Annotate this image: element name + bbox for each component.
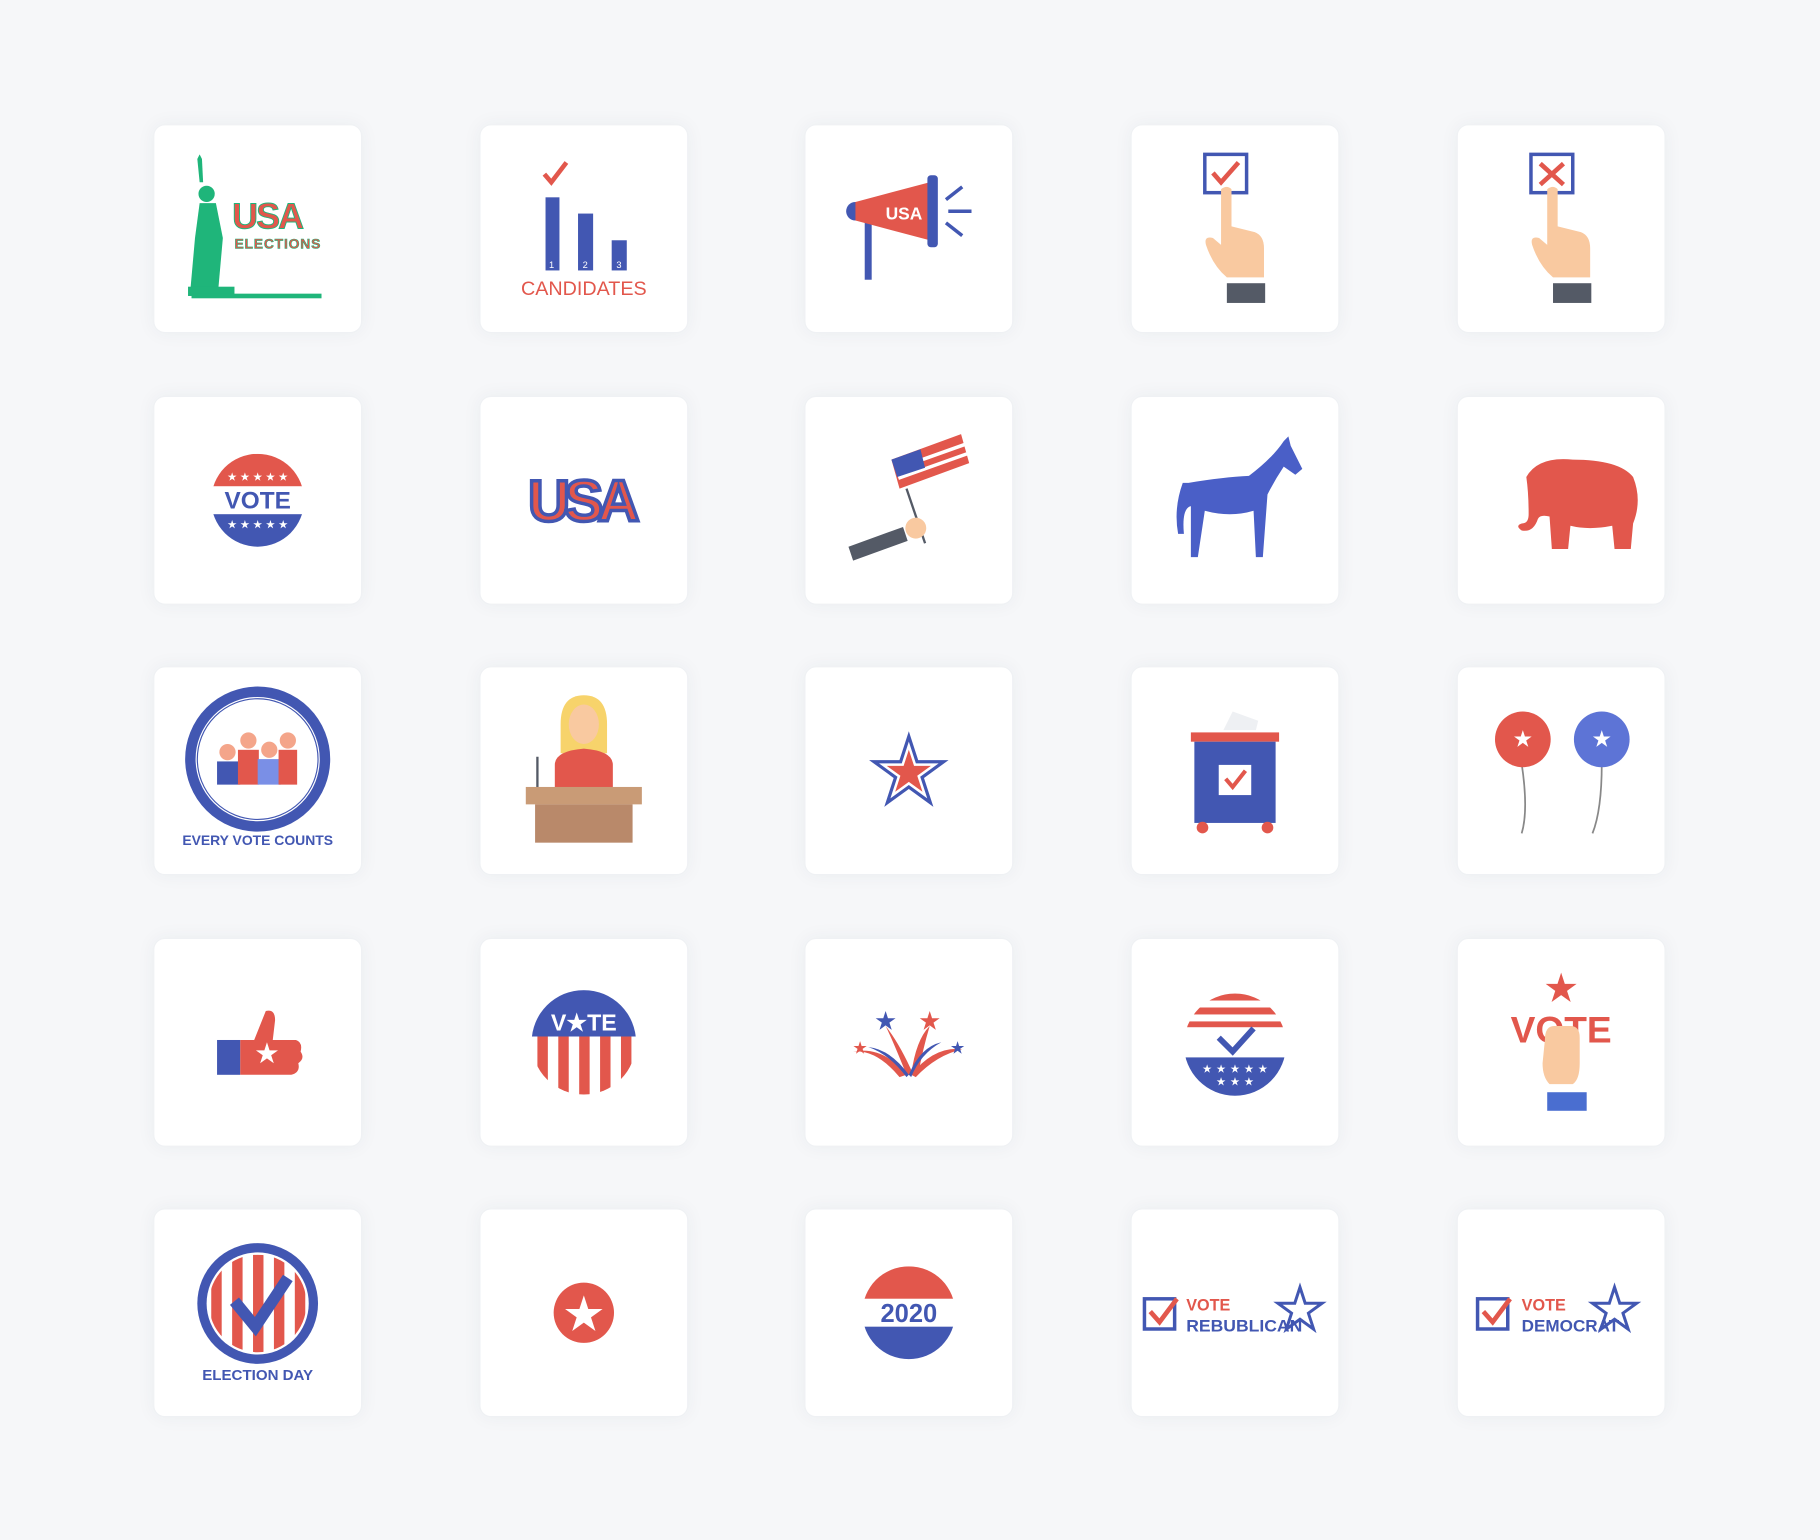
icon: VOTE badge [213,454,302,547]
icon: VOTE badge: VOTE [225,487,291,514]
icon: vote republican label: VOTE [1186,1296,1231,1314]
icon: megaphone [846,175,972,280]
card: election day [153,1208,362,1417]
card: vote democrat [1457,1208,1666,1417]
text: USA ELECTIONS: USA [232,196,304,237]
card: vote republican [1131,1208,1339,1417]
icon: election day badge [197,1243,318,1384]
card: vote fist [1457,938,1666,1147]
icon: 2020 badge: 2020 [880,1300,937,1328]
icon: bar chart with check [544,162,627,270]
card: candidates [479,124,688,333]
text: CANDIDATES: CANDIDATES [521,278,647,300]
card: donkey [1131,396,1339,605]
card: elephant [1457,396,1666,605]
card: vote badge [153,396,362,605]
icon: woman at podium [526,695,642,843]
card: fireworks [804,938,1013,1147]
card: speaker at podium [479,666,688,875]
card: 2020 badge [804,1208,1013,1417]
card: check badge [1131,938,1339,1147]
icon: striped check badge [1186,994,1284,1096]
icon: vote republican label [1144,1287,1322,1335]
card: star [804,666,1013,875]
card: thumbs up [153,938,362,1147]
text: USA ELECTIONS: ELECTIONS [234,235,320,251]
icon: statue of liberty [188,154,234,296]
card: USA elections [153,124,362,333]
icon: vote striped badge [532,990,636,1095]
icon: red circle star [554,1283,614,1343]
icon: thumbs up [217,1011,302,1075]
icon: vote striped badge: V★TE [551,1010,617,1036]
card: megaphone [804,124,1013,333]
icon: star [869,731,949,807]
card: hand cross [1457,124,1666,333]
icon: ballot box [1191,712,1279,833]
card: flag in hand [804,396,1013,605]
icon: hand pressing checkbox [1205,154,1265,303]
icon: bar chart with check: 2 [583,260,588,270]
icon: bar chart with check: 3 [616,260,621,270]
icon: star fireworks [853,1011,964,1077]
icon: republican elephant [1518,459,1638,549]
icon: every vote counts badge: EVERY VOTE COUNTS [182,832,333,848]
card: V*TE badge [479,938,688,1147]
icon: election day badge: ELECTION DAY [202,1367,313,1384]
icon: 2020 badge [862,1266,955,1362]
icon: vote democrat label [1478,1287,1637,1335]
icon: megaphone: USA [886,203,923,223]
icon: vote democrat label: DEMOCRAT [1522,1317,1619,1335]
card: star circle [479,1208,688,1417]
icon: hand waving flag [848,434,969,561]
text: USA: USA [528,469,640,534]
icon: vote republican label: REBUBLICAN [1186,1317,1302,1335]
card: hand check [1131,124,1339,333]
icon: VOTE raised fist [1511,973,1612,1111]
icon: star balloons [1495,712,1630,833]
card: USA letters [479,396,688,605]
card: balloons [1457,666,1666,875]
icon: hand pressing cross box [1531,154,1591,303]
icon: democrat donkey [1177,436,1302,557]
card: every vote counts [153,666,362,875]
text: USA ELECTIONS [232,196,320,251]
icon: every vote counts badge [182,692,333,848]
icon: vote democrat label: VOTE [1522,1296,1566,1314]
card: ballot box [1131,666,1339,875]
icon: bar chart with check: 1 [549,260,554,270]
icon: VOTE raised fist: VOTE [1511,1008,1612,1050]
